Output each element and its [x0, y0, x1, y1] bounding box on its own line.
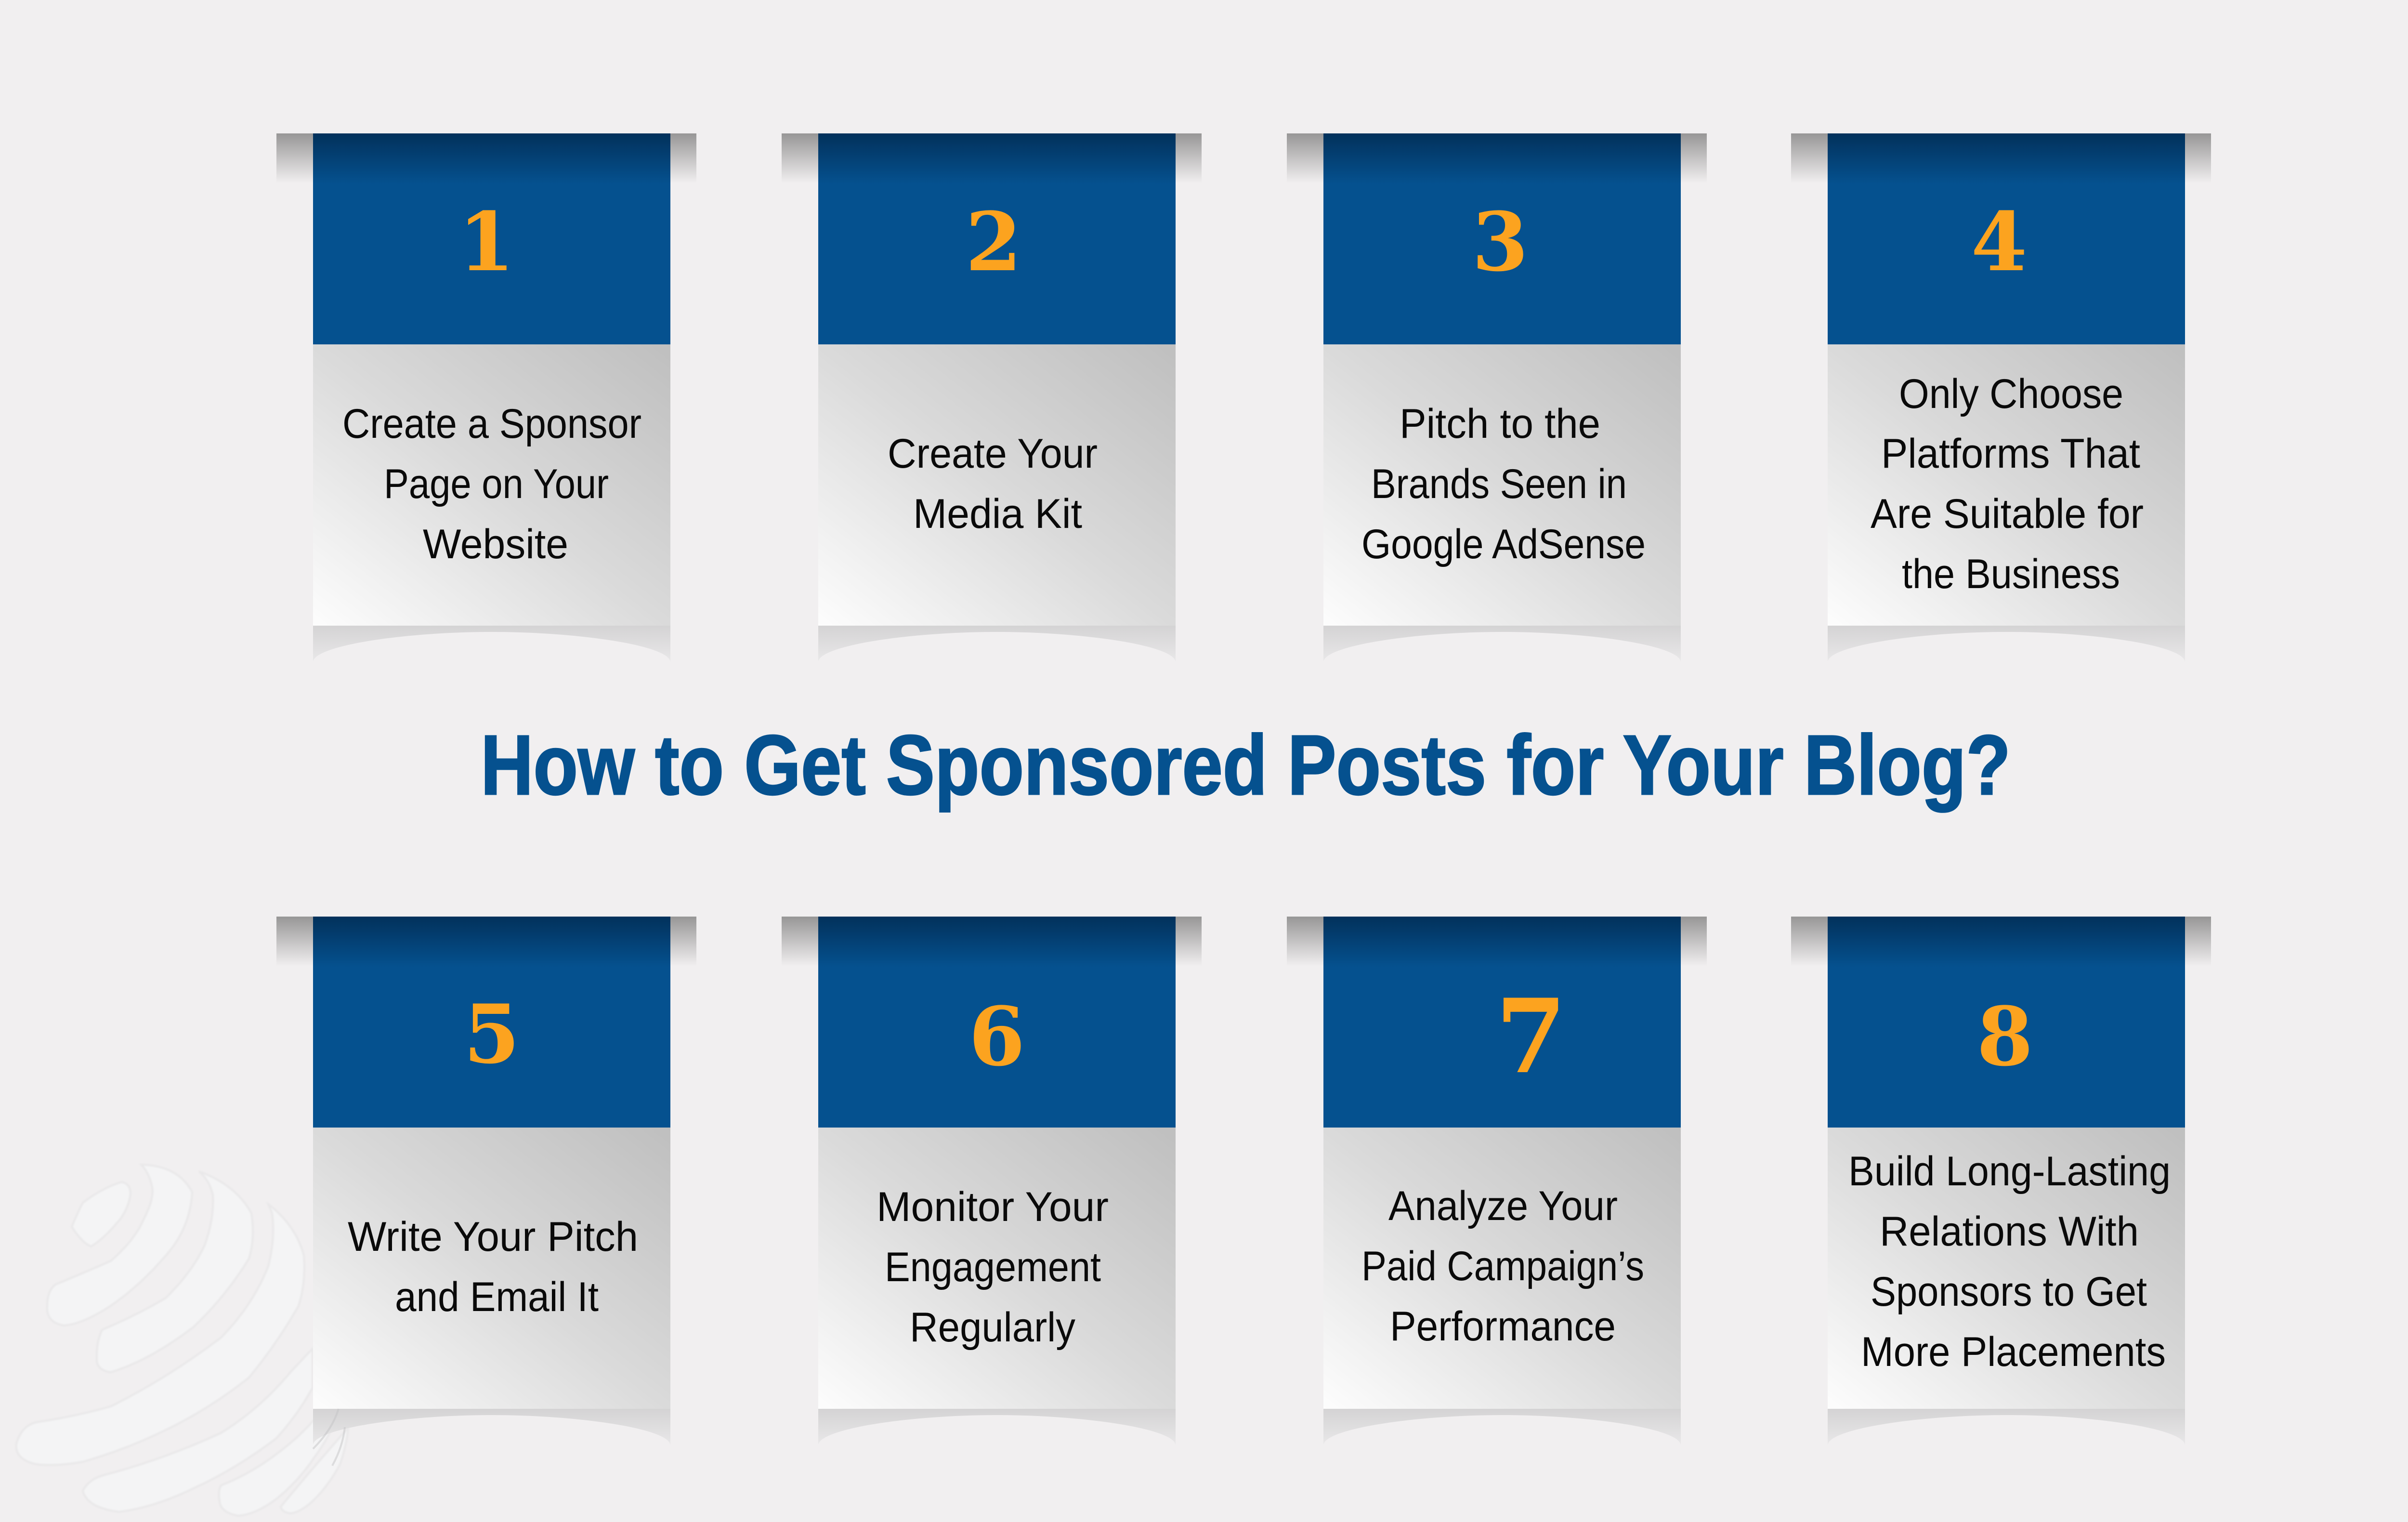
ribbon 1 [276, 133, 696, 662]
text: step 8: Sponsors to Get [1871, 1269, 2147, 1315]
text: step 1: Website [423, 521, 568, 567]
number 2: 2 [966, 194, 1021, 289]
text: step 3: Brands Seen in [1371, 461, 1627, 507]
text: step 8: Build Long-Lasting [1848, 1148, 2171, 1194]
text: step 3 [1361, 401, 1646, 567]
text: step 1 [342, 401, 641, 567]
ribbon 3 [1287, 133, 1707, 662]
ribbon 8 [1791, 917, 2211, 1445]
ribbon 7 [1287, 917, 1707, 1445]
text: step 5: and Email It [395, 1274, 599, 1320]
text: step 6 [877, 1184, 1109, 1351]
watermark globe [16, 1165, 348, 1516]
number 7: 7 [1495, 976, 1567, 1096]
text: step 6: Regularly [910, 1304, 1075, 1351]
card 2 [782, 133, 1202, 662]
ribbon 4 [1791, 133, 2211, 662]
text: step 7 [1361, 1183, 1644, 1350]
text: step 7: Paid Campaign’s [1361, 1243, 1644, 1289]
text: step 5: Write Your Pitch [348, 1214, 638, 1260]
card 5 [276, 917, 696, 1466]
card 3 [1287, 133, 1707, 662]
text: step 3: Pitch to the [1400, 401, 1600, 447]
text: step 2 [888, 431, 1098, 537]
ribbon 2 [782, 133, 1202, 662]
title: How to Get Sponsored Posts for Your Blog? [481, 718, 2011, 813]
number 3: 3 [1472, 194, 1528, 289]
text: step 2: Create Your [888, 431, 1098, 477]
text: step 7: Performance [1390, 1303, 1616, 1350]
text: step 1: Page on Your [384, 461, 609, 507]
number 5: 5 [464, 986, 520, 1082]
text: step 1: Create a Sponsor [342, 401, 641, 447]
text: step 6: Engagement [885, 1244, 1101, 1290]
card 4 [1791, 133, 2211, 662]
card 6 [782, 917, 1202, 1445]
text: step 5 [348, 1214, 638, 1320]
text: step 4 [1871, 371, 2144, 597]
card 7 [1287, 917, 1707, 1445]
card 1 [276, 133, 696, 662]
number 8: 8 [1977, 989, 2033, 1084]
number 6: 6 [969, 989, 1025, 1084]
text: step 3: Google AdSense [1361, 521, 1646, 567]
text: step 6: Monitor Your [877, 1184, 1109, 1230]
text: step 8 [1848, 1148, 2171, 1375]
card 8 [1791, 917, 2211, 1445]
text: step 4: Only Choose [1899, 371, 2123, 417]
ribbon 6 [782, 917, 1202, 1445]
text: step 4: Are Suitable for [1871, 491, 2144, 537]
text: step 2: Media Kit [913, 491, 1082, 537]
number 1: 1 [458, 194, 514, 289]
text: step 7: Analyze Your [1388, 1183, 1618, 1229]
number 4: 4 [1971, 194, 2027, 289]
text: step 8: Relations With [1880, 1208, 2139, 1255]
text: step 4: the Business [1902, 551, 2120, 597]
text: step 4: Platforms That [1881, 431, 2140, 477]
text: step 8: More Placements [1861, 1329, 2166, 1375]
ribbon 5 [276, 917, 696, 1466]
